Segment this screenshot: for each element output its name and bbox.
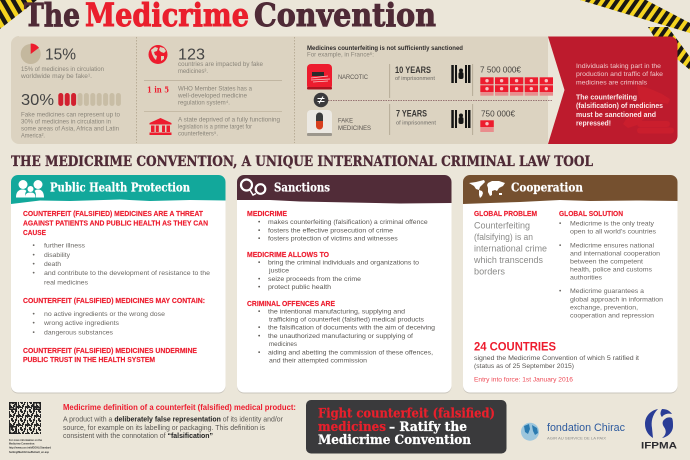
list: offences: • bbox=[258, 325, 261, 332]
fine: 750 000 euros bbox=[480, 109, 516, 132]
icon: institution building bbox=[150, 118, 172, 135]
column: global problem: international crime bbox=[474, 243, 547, 254]
column: global problem: (falsifying) is an bbox=[474, 232, 533, 243]
text: must be sanctioned: The counterfeiting bbox=[576, 94, 637, 102]
callout: ratify: Medicrime Convention bbox=[318, 433, 471, 448]
list: harms: further illness bbox=[44, 242, 86, 250]
column: global solution: Medicrime is the only treaty bbox=[570, 221, 655, 228]
column: global problem bbox=[473, 211, 547, 278]
list: offences: the intentional manufacturing, supplying and bbox=[268, 309, 405, 316]
callout: ratify: Fight counterfeit (falsified) bbox=[318, 406, 495, 422]
list: contents: • bbox=[32, 330, 36, 336]
stat: 24 countries bbox=[474, 342, 639, 370]
list: allows: • bbox=[258, 260, 261, 267]
list: offences: • bbox=[258, 309, 261, 316]
list: harms bbox=[32, 242, 210, 286]
tape: top left bbox=[0, 0, 37, 29]
list: harms: death bbox=[44, 261, 61, 268]
text: criminals bbox=[576, 63, 663, 87]
panel: public health protection bbox=[11, 175, 226, 394]
heading: may contain: COUNTERFEIT (FALSIFIED) MEDICINES MAY CONTAIN: bbox=[23, 298, 205, 305]
tape: top right bbox=[580, 0, 690, 70]
list: allows: protect public health bbox=[268, 284, 331, 291]
text: QR caption bbox=[9, 438, 51, 454]
text: QR caption: For more information on the bbox=[9, 438, 43, 442]
text: threat: AGAINST PATIENTS AND PUBLIC HEALTH AS THEY CAN bbox=[23, 220, 208, 228]
heading: public health protection: Public Health Protection bbox=[50, 180, 190, 194]
list: contents bbox=[32, 311, 165, 336]
list: contents: no active ingredients or the wrong dose bbox=[44, 311, 165, 318]
list: allows: seize proceeds from the crime bbox=[268, 276, 361, 283]
callout: ratify bbox=[306, 400, 506, 454]
heading: medicrime: MEDICRIME bbox=[247, 211, 287, 218]
callout: ratify: medicines bbox=[318, 420, 386, 435]
text: undermine trust: COUNTERFEIT (FALSIFIED) MEDICINES UNDERMINE bbox=[23, 348, 197, 355]
list: offences: aiding and abetting the commission of these offences, bbox=[268, 349, 433, 356]
list: medicrime: fosters the effective prosecution of crime bbox=[268, 227, 393, 234]
stat: 123 countries: countries are impacted by fake bbox=[178, 61, 263, 68]
list: offences: • bbox=[258, 349, 261, 356]
section heading: THE MEDICRIME CONVENTION, A UNIQUE INTERNATIONAL CRIMINAL LAW TOOL bbox=[11, 154, 593, 170]
panel: call to sanction bbox=[548, 36, 678, 144]
fine: 750 000 euros: 750 000€ bbox=[481, 109, 516, 118]
column: global solution: Medicrime guarantees a bbox=[570, 288, 644, 295]
text: 10 years: 10 YEARS bbox=[395, 65, 431, 75]
fine: 7 500 000 euros bbox=[480, 66, 553, 96]
icon: jail bars bbox=[451, 110, 470, 128]
text: criminals: production and traffic of fake bbox=[576, 71, 663, 78]
text: threat bbox=[23, 211, 208, 237]
text: QR caption: http://www.coe.int/t/DGHL/Standard bbox=[9, 446, 51, 450]
text: must be sanctioned bbox=[576, 94, 663, 128]
column: global solution: and international cooperation bbox=[570, 250, 660, 257]
text: definition: source, for example on its labelling or packaging. This definition is bbox=[63, 425, 266, 432]
text: 10 years: of imprisonment bbox=[395, 76, 435, 82]
list: medicrime: • bbox=[258, 235, 261, 242]
column: global problem: which transcends bbox=[473, 255, 543, 266]
list: allows: • bbox=[258, 276, 261, 283]
list: medicrime: makes counterfeiting (falsification) a criminal offence bbox=[268, 219, 428, 226]
label: fake medicines: MEDICINES bbox=[338, 125, 372, 132]
icon: narcotic bbox=[307, 64, 332, 90]
list: harms: • bbox=[32, 252, 36, 259]
list: contents: wrong active ingredients bbox=[43, 320, 120, 327]
text: QR caption: Setting/MediCrime/Default_en.asp bbox=[9, 450, 49, 454]
icon: gavel bbox=[623, 85, 674, 134]
column: global solution: open to all world’s countries bbox=[570, 229, 657, 236]
text: 7 years: of imprisonment bbox=[396, 120, 436, 126]
list: offences: • bbox=[258, 333, 261, 340]
stat: 123 countries: 123 bbox=[178, 46, 205, 64]
list: offences: the falsification of documents with the aim of deceiving bbox=[268, 325, 435, 332]
icon: fake medicine bbox=[307, 110, 332, 136]
list: medicrime: • bbox=[258, 219, 261, 226]
stat: 15 percent: worldwide may be fake¹. bbox=[20, 73, 92, 80]
icon: jail bars bbox=[451, 65, 470, 83]
list: medicrime: • bbox=[258, 227, 261, 234]
list: offences: trafficking of counterfeit (falsified) medical products bbox=[269, 317, 425, 324]
stat: 30 percent: America². bbox=[21, 133, 45, 140]
text: weak legislation: legislation is a prime target for bbox=[178, 124, 253, 131]
text: entry into force: Entry into force: 1st January 2016 bbox=[474, 376, 573, 384]
panel: cooperation bbox=[463, 175, 678, 394]
title bbox=[24, 0, 436, 34]
logo: IFPMA bbox=[641, 409, 677, 452]
heading: sanctions: Sanctions bbox=[274, 180, 330, 194]
list: offences: the unauthorized manufacturing or supplying of bbox=[268, 333, 413, 340]
list: offences: and their attempted commission bbox=[269, 357, 367, 364]
text: threat: CAUSE bbox=[23, 230, 46, 237]
list: contents: • bbox=[32, 311, 36, 318]
icon: family bbox=[16, 180, 44, 198]
column: global solution: • bbox=[559, 221, 562, 228]
stat: 1 in 5: regulation system⁴. bbox=[178, 100, 230, 107]
list: harms: and contribute to the development of resistance to the bbox=[44, 270, 210, 277]
text: weak legislation bbox=[178, 117, 280, 138]
icon: handcuffs bbox=[241, 180, 265, 195]
text: undermine trust bbox=[23, 348, 197, 364]
list: contents: dangerous substances bbox=[44, 330, 114, 336]
stat: 123 countries: medicines³. bbox=[178, 68, 208, 75]
logo: IFPMA: IFPMA bbox=[641, 440, 677, 452]
list: harms: • bbox=[32, 270, 36, 277]
label: fake medicines: FAKE bbox=[338, 118, 354, 124]
pill gauge bbox=[58, 93, 121, 106]
stat: 24 countries: 24 COUNTRIES bbox=[474, 342, 556, 354]
column: global problem: GLOBAL PROBLEM bbox=[474, 211, 537, 218]
icon: world map bbox=[469, 180, 505, 198]
list: harms: • bbox=[32, 242, 36, 250]
panel: sanctions comparison bbox=[307, 45, 553, 136]
heading: criminal offences: CRIMINAL OFFENCES ARE bbox=[247, 301, 335, 308]
text: weak legislation: counterfeiters⁵. bbox=[178, 131, 218, 138]
stat: 15 percent: 15% of medicines in circulation bbox=[21, 66, 104, 73]
list: medicrime bbox=[258, 219, 428, 242]
heading: medicrime allows to: MEDICRIME ALLOWS TO bbox=[247, 252, 330, 259]
text: definition: A product with a deliberately false representation of its identity and/or bbox=[63, 416, 284, 424]
text: QR caption: Medicrime Convention: bbox=[9, 442, 35, 446]
text: 7 years: 7 YEARS bbox=[396, 109, 427, 119]
stat: 30 percent: some areas of Asia, Africa and Latin bbox=[21, 126, 119, 133]
heading: cooperation: Cooperation bbox=[511, 180, 583, 194]
stat: 1 in 5: WHO Member States has a bbox=[178, 86, 252, 93]
logo: fondation Chirac: AGIR AU SERVICE DE LA PAIX bbox=[547, 436, 607, 440]
list: allows: justice bbox=[268, 268, 289, 275]
column: global solution: • bbox=[559, 242, 562, 249]
list: harms: • bbox=[32, 261, 36, 268]
label: narcotic: NARCOTIC bbox=[338, 74, 368, 81]
stat: 1 in 5: 1 in 5 bbox=[147, 84, 169, 94]
list: contents: • bbox=[32, 320, 36, 327]
stat: 30 percent: 30% of medicines in circulation in bbox=[21, 118, 111, 125]
text: definition: Medicrime definition of a counterfeit (falsified) medical product: bbox=[63, 402, 296, 412]
fine: 7 500 000 euros: 7 500 000€ bbox=[480, 66, 522, 74]
column: global solution: • bbox=[559, 288, 562, 295]
column: global problem: Counterfeiting bbox=[474, 220, 530, 231]
stat: 1 in 5: well-developed medicine bbox=[177, 93, 247, 100]
stat: 30 percent: Fake medicines can represent up to bbox=[21, 111, 120, 118]
text: threat: COUNTERFEIT (FALSIFIED) MEDICINES ARE A THREAT bbox=[23, 211, 204, 218]
callout: ratify: – Ratify the bbox=[389, 420, 467, 435]
column: global solution bbox=[559, 211, 663, 320]
column: global solution: between the competent bbox=[570, 259, 643, 266]
text: weak legislation: A state deprived of a fully functioning bbox=[178, 117, 280, 124]
panel: sanctions comparison: For example, in France⁶: bbox=[307, 52, 374, 59]
text: criminals: Individuals taking part in the bbox=[576, 63, 661, 70]
stat: 15 percent bbox=[20, 44, 104, 80]
text: must be sanctioned: must be sanctioned and bbox=[576, 112, 656, 119]
panel: sanctions comparison: Medicines counterfeiting is not sufficiently sanctioned bbox=[307, 45, 463, 52]
text: definition bbox=[63, 402, 296, 440]
column: global solution: cooperation and repression bbox=[570, 313, 654, 320]
QR code bbox=[9, 402, 41, 434]
panel: sanctions bbox=[237, 175, 452, 394]
stat: 30 percent bbox=[21, 92, 121, 140]
text: 7 years bbox=[396, 109, 436, 126]
list: allows: • bbox=[258, 284, 261, 291]
list: offences: medicines bbox=[269, 341, 298, 348]
column: global solution: Medicrime ensures national bbox=[570, 242, 655, 249]
stat: 1 in 5 bbox=[147, 84, 252, 107]
label: fake medicines bbox=[338, 118, 372, 132]
panel: key statistics bbox=[11, 36, 548, 144]
list: harms: real medicines bbox=[44, 280, 89, 286]
column: global solution: global approach in information bbox=[570, 296, 663, 303]
text: undermine trust: PUBLIC TRUST IN THE HEALTH SYSTEM bbox=[23, 357, 155, 364]
text: criminals: medicines are criminals bbox=[576, 80, 648, 87]
column: global solution: health, police and customs bbox=[570, 267, 653, 274]
column: global solution: GLOBAL SOLUTION bbox=[559, 211, 623, 218]
list: harms: disability bbox=[44, 252, 71, 259]
column: global solution: authorities bbox=[570, 275, 603, 282]
icon: globe bbox=[148, 45, 168, 64]
stat: 24 countries: signed the Medicrime Convention of which 5 ratified it bbox=[474, 355, 639, 362]
stat: 30 percent: 30% bbox=[21, 92, 54, 109]
column: global solution: exchange, prevention, bbox=[570, 304, 638, 311]
text: must be sanctioned: repressed! bbox=[576, 120, 611, 128]
list: allows bbox=[258, 260, 419, 291]
stat: 15 percent: 15% bbox=[45, 46, 76, 64]
column: global problem: borders bbox=[474, 267, 505, 278]
list: offences bbox=[258, 309, 435, 364]
stat: 123 countries bbox=[178, 46, 263, 75]
logo: fondation Chirac: fondation Chirac bbox=[547, 422, 625, 434]
stat: 24 countries: (status as of 25 September 2015) bbox=[474, 363, 574, 370]
text: must be sanctioned: (falsification) of medicines bbox=[576, 103, 663, 110]
icon: not equal bbox=[314, 93, 328, 107]
logo: fondation Chirac bbox=[521, 422, 625, 441]
list: medicrime: fosters protection of victims and witnesses bbox=[268, 235, 398, 242]
text: definition: consistent with the connotation of “falsification” bbox=[63, 433, 213, 440]
text: 10 years bbox=[395, 65, 435, 82]
list: allows: bring the criminal individuals and organizations to bbox=[268, 260, 419, 267]
